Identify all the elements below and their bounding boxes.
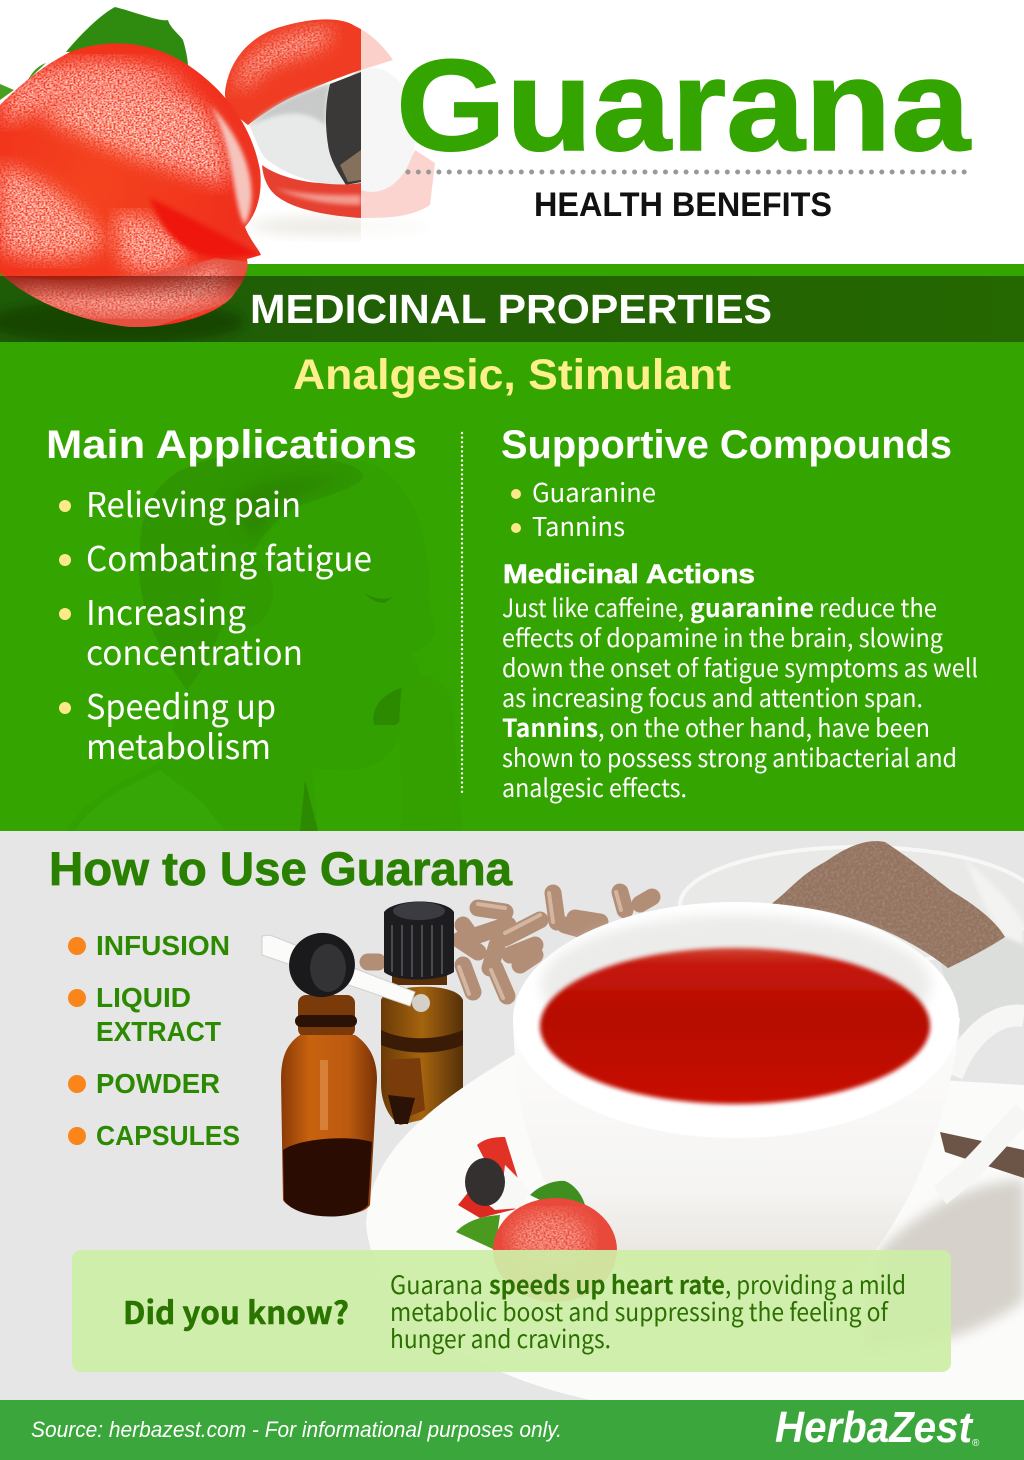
photo: dropper and cap	[262, 926, 430, 1012]
list: forms of use	[68, 930, 240, 1151]
heading: how to use guarana: How to Use Guarana	[49, 842, 513, 895]
photo: tea	[540, 948, 930, 1104]
list: forms of use: INFUSION	[96, 930, 230, 961]
callout text: metabolic boost and suppressing the feeling of	[390, 1293, 889, 1329]
panel: supportive compounds	[501, 423, 978, 805]
bullet list: compounds: Guaranine	[532, 473, 656, 510]
text: medicinal actions description: analgesic effects.	[502, 769, 687, 805]
list: forms of use: POWDER	[96, 1068, 220, 1099]
bullet list: applications: Increasing	[86, 586, 246, 635]
callout heading: Did you know?	[123, 1288, 349, 1333]
bullet list: compounds: Tannins	[532, 507, 625, 544]
photo: spoon	[940, 1132, 1024, 1178]
photo: yawning woman silhouette	[139, 453, 402, 831]
heading: medicinal actions: Medicinal Actions	[503, 559, 755, 589]
text: medicinal actions description: down the onset of fatigue symptoms as well	[502, 649, 978, 685]
photo: teacup rim	[513, 902, 959, 1138]
text: medicinal actions description: Tannins	[502, 709, 598, 745]
panel: main applications	[46, 423, 417, 769]
bullet list: applications	[59, 478, 372, 769]
dark band: medicinal properties background	[0, 276, 1024, 342]
text: medicinal actions description: effects of dopamine in the brain, slowing	[502, 619, 943, 655]
bullet list: applications: metabolism	[86, 720, 271, 769]
photo: small guarana fruit on saucer	[456, 1137, 617, 1302]
footer	[0, 1400, 1024, 1460]
bullet list: applications: Combating fatigue	[86, 532, 372, 581]
photo: saucer	[366, 1055, 1024, 1402]
title: Guarana	[396, 32, 972, 178]
list: forms of use: CAPSULES	[96, 1120, 240, 1151]
logo: HerbaZest: HerbaZest	[775, 1403, 974, 1452]
callout text	[390, 1266, 906, 1356]
callout: did you know	[123, 1266, 906, 1356]
photo: right amber bottle	[381, 902, 463, 1125]
bullet list: compounds	[511, 473, 656, 544]
photo: large red guarana fruit	[0, 30, 270, 344]
photo: teacup body	[514, 1018, 960, 1250]
callout background: did you know	[72, 1250, 951, 1372]
text: properties list: Analgesic, Stimulant	[293, 351, 731, 399]
bullet list: applications: Speeding up	[86, 680, 276, 729]
photo: left amber bottle	[281, 995, 377, 1216]
fading overlay over opened fruit	[361, 0, 451, 243]
photo: glass bowl with powder	[680, 841, 1024, 1035]
callout text: Guarana	[390, 1266, 483, 1302]
dotted divider	[408, 170, 970, 174]
text: medicinal actions description: Just like caffeine,	[502, 589, 684, 625]
photo: tea, bottles, capsules and powder	[72, 841, 1024, 1402]
photo: cup handle	[940, 1015, 1024, 1195]
text: medicinal actions description: reduce the	[819, 589, 937, 625]
photo: capsules	[368, 892, 652, 998]
subtitle: HEALTH BENEFITS	[534, 186, 832, 224]
text: medicinal actions description: as increasing focus and attention span.	[502, 679, 923, 715]
registered mark: ®	[972, 1438, 980, 1449]
bullet list: applications: Relieving pain	[86, 478, 301, 527]
list: forms of use: EXTRACT	[96, 1016, 221, 1047]
icon: fruit leaves	[0, 7, 188, 100]
source note: Source: herbazest.com - For informational purposes only.	[31, 1417, 562, 1442]
photo: saucer shadow	[876, 1175, 1024, 1343]
photo: opened guarana fruit with seed	[225, 19, 435, 236]
callout text: , providing a mild	[725, 1266, 906, 1302]
text: medicinal actions description	[502, 589, 978, 805]
text: medicinal actions description: guaranine	[690, 589, 814, 625]
bullet list: applications: concentration	[86, 626, 303, 675]
list: forms of use: LIQUID	[96, 982, 191, 1013]
callout text: hunger and cravings.	[390, 1320, 611, 1356]
heading: main applications: Main Applications	[46, 423, 417, 467]
text: medicinal actions description: , on the other hand, have been	[598, 709, 930, 745]
column divider	[461, 433, 463, 796]
heading: medicinal properties: MEDICINAL PROPERTIES	[250, 286, 772, 332]
text: medicinal actions description: shown to possess strong antibacterial and	[502, 739, 957, 775]
callout text: speeds up heart rate	[489, 1266, 725, 1302]
heading: supportive compounds: Supportive Compounds	[501, 423, 952, 467]
